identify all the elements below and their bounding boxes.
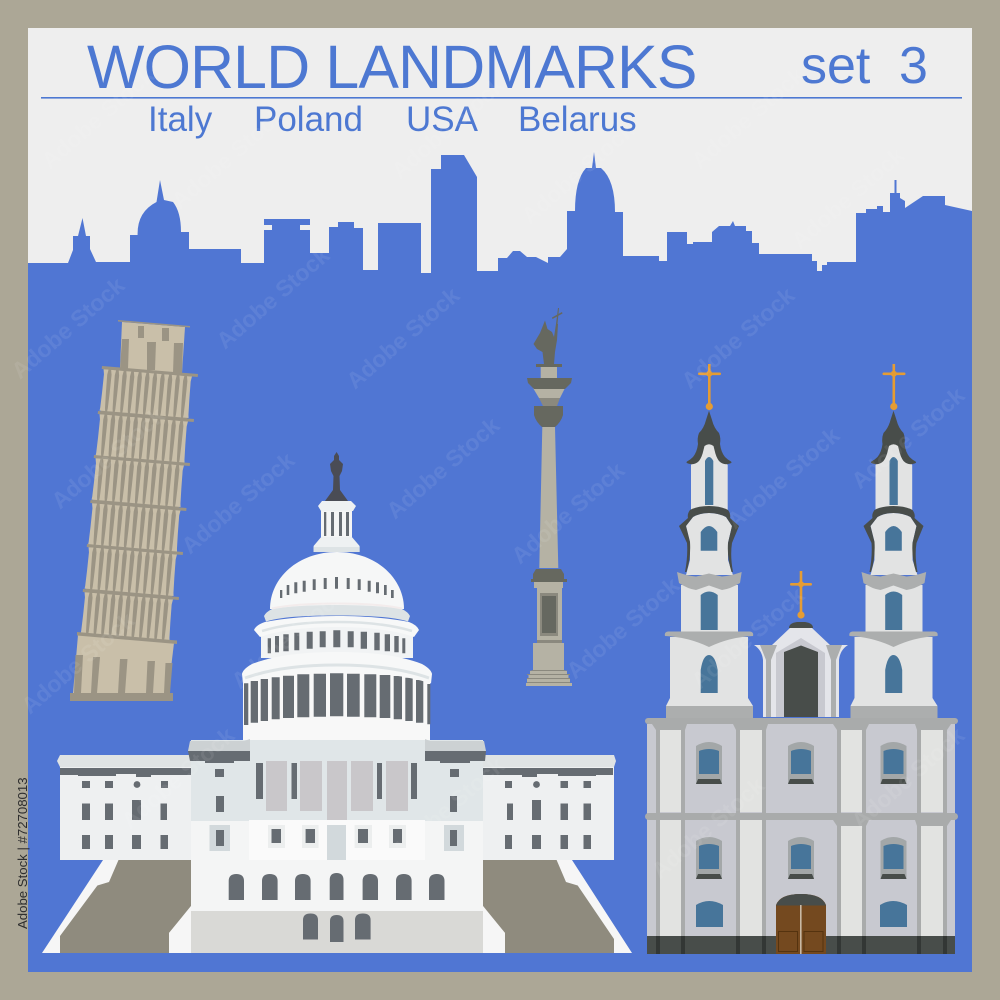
church door (776, 894, 826, 954)
column statue (534, 308, 562, 367)
watermark: Adobe Stock (686, 62, 810, 174)
watermark: Adobe Stock (846, 382, 970, 494)
watermark: Adobe Stock (386, 752, 510, 864)
country list: Poland (254, 100, 363, 139)
watermark: Adobe Stock (561, 572, 685, 684)
watermark: Adobe Stock (226, 582, 350, 694)
title: WORLD LANDMARKS (87, 33, 697, 101)
stock id label: Adobe Stock | #72708013 (15, 777, 30, 929)
set number: 3 (899, 37, 928, 95)
watermark: Adobe Stock (381, 412, 505, 524)
landmark: Leaning Tower of Pisa (70, 320, 198, 701)
watermark: Adobe Stock (516, 117, 640, 229)
column capital (527, 367, 572, 427)
Capitol central block (188, 739, 486, 911)
Pisa top belfry (118, 320, 190, 373)
watermark: Adobe Stock (16, 607, 140, 719)
country list: Belarus (518, 100, 637, 139)
landmark: Belarus baroque church (645, 364, 958, 954)
column pedestal (526, 569, 572, 686)
Capitol dome (264, 552, 410, 622)
watermark: Adobe Stock (46, 402, 170, 514)
watermark: Adobe Stock (341, 282, 465, 394)
title underline (41, 97, 962, 99)
Capitol right ramp (479, 860, 632, 953)
Capitol lower colonnade (244, 673, 430, 725)
watermark: Adobe Stock (721, 422, 845, 534)
watermark: Adobe Stock (846, 722, 970, 834)
landmark: US Capitol (42, 452, 632, 953)
column shaft (539, 427, 558, 568)
watermark: Adobe Stock (6, 272, 130, 384)
church main facade (645, 718, 958, 954)
country list (148, 100, 637, 139)
Capitol statue (325, 452, 348, 501)
Capitol upper drum (261, 625, 413, 658)
watermark: Adobe Stock (506, 457, 630, 569)
watermark (6, 62, 970, 884)
header background with skyline silhouette (28, 28, 972, 273)
church centre pediment (754, 571, 848, 717)
Capitol lantern (314, 501, 360, 552)
watermark: Adobe Stock (116, 722, 240, 834)
church right tower (849, 364, 938, 719)
Capitol dome base drum (243, 672, 430, 740)
country list: USA (406, 100, 479, 139)
set number: set (801, 37, 871, 95)
Capitol lower cornice (242, 652, 432, 684)
watermark: Adobe Stock (786, 142, 910, 254)
Pisa ground storey (70, 632, 177, 701)
watermark: Adobe Stock (676, 282, 800, 394)
Capitol terrace base (169, 902, 505, 953)
landmark: Sigismund column (526, 308, 572, 686)
watermark: Adobe Stock (166, 102, 290, 214)
country list: Italy (148, 100, 213, 139)
watermark: Adobe Stock (646, 772, 770, 884)
watermark: Adobe Stock (386, 72, 510, 184)
watermark: Adobe Stock (176, 447, 300, 559)
Pisa colonnade tiers (79, 366, 198, 642)
watermark: Adobe Stock (211, 242, 335, 354)
Capitol upper cornice (254, 616, 419, 637)
watermark: Adobe Stock (36, 62, 160, 174)
church left tower (665, 364, 753, 719)
Capitol left wing (57, 755, 191, 860)
church windows (696, 742, 907, 927)
Capitol left ramp (42, 860, 195, 953)
watermark: Adobe Stock (686, 582, 810, 694)
Capitol right wing (483, 755, 616, 860)
